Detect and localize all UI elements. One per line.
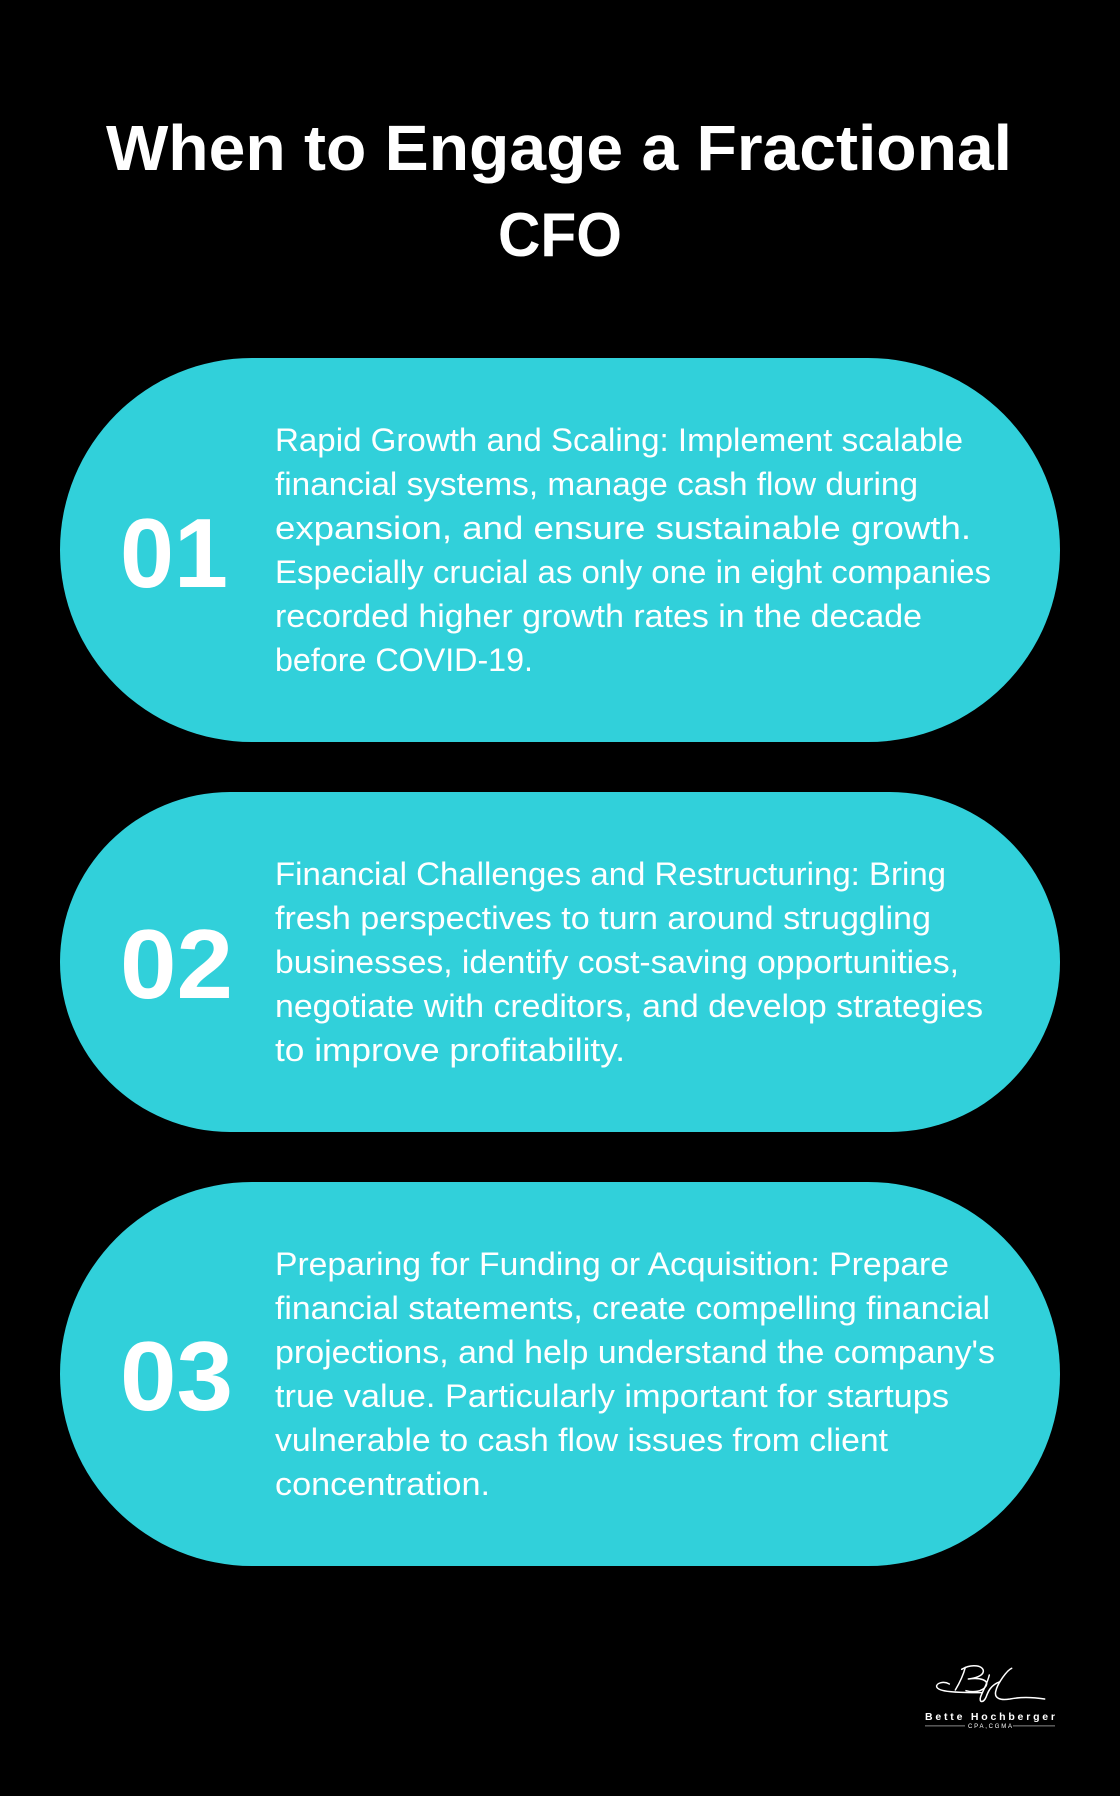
text block: rapid growth: expansion, and ensure sustainable growth. — [275, 510, 971, 546]
text block: preparing for funding: vulnerable to cash flow issues from client — [275, 1422, 888, 1458]
text block: rapid growth: Especially crucial as only one in eight companies — [275, 554, 991, 590]
panel: financial challenges and restructuring — [60, 792, 1060, 1132]
text block: preparing for funding: true value. Particularly important for startups — [275, 1378, 949, 1414]
text block: financial challenges — [275, 856, 983, 1068]
number 01: 01 — [120, 498, 228, 608]
number 02: 02 — [120, 909, 233, 1019]
number 03: 03 — [120, 1321, 233, 1431]
text block: preparing for funding: projections, and help understand the company's — [275, 1334, 995, 1370]
text block: rapid growth: recorded higher growth rates in the decade — [275, 598, 922, 634]
text block: rapid growth — [275, 422, 991, 678]
text block: financial challenges: businesses, identify cost-saving opportunities, — [275, 944, 959, 980]
title — [106, 112, 1012, 270]
text block: preparing for funding — [275, 1246, 995, 1502]
text block: preparing for funding: Preparing for Funding or Acquisition: Prepare — [275, 1246, 949, 1282]
logo credentials: CPA,CGMA — [968, 1724, 1012, 1730]
text block: rapid growth: financial systems, manage cash flow during — [275, 466, 918, 502]
logo name: Bette Hochberger — [925, 1711, 1055, 1723]
text block: financial challenges: negotiate with creditors, and develop strategies — [275, 988, 983, 1024]
text block: rapid growth: before COVID-19. — [275, 642, 533, 678]
text block: rapid growth: Rapid Growth and Scaling: Implement scalable — [275, 422, 963, 458]
icon: signature monogram — [937, 1666, 1045, 1702]
logo: Bette Hochberger — [925, 1666, 1055, 1730]
text block: financial challenges: fresh perspectives to turn around struggling — [275, 900, 931, 936]
text block: financial challenges: Financial Challenges and Restructuring: Bring — [275, 856, 946, 892]
panel: rapid growth and scaling — [60, 358, 1060, 742]
text block: financial challenges: to improve profitability. — [275, 1032, 625, 1068]
text block: preparing for funding: financial statements, create compelling financial — [275, 1290, 990, 1326]
title: CFO — [498, 201, 622, 270]
text block: preparing for funding: concentration. — [275, 1466, 490, 1502]
title: When to Engage a Fractional — [106, 112, 1012, 184]
panel: preparing for funding or acquisition — [60, 1182, 1060, 1566]
